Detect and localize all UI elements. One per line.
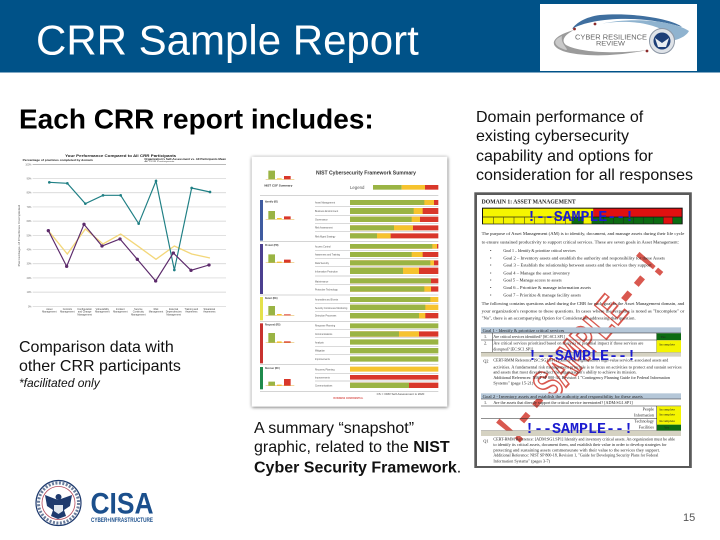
goal tables: Incomplete: [659, 412, 675, 416]
goal tables: 1.: [484, 334, 487, 339]
domain header and goals: •: [490, 292, 492, 297]
panel: NIST framework summary: NIST Cybersecurity Framework Summary: [316, 171, 417, 177]
domain header and goals: your organization's response to these questions. In cases where the response is noted as "Incomplete" or: [482, 308, 685, 313]
category bars: [350, 200, 438, 388]
domain header and goals: Goal 6 – Prioritize & manage information assets: [503, 285, 591, 290]
domain header and goals: •: [490, 248, 492, 253]
panel: NIST framework summary: Recover (RC): [265, 368, 280, 370]
text block: summary snapshot: Cyber Security Framework.: [254, 460, 461, 476]
panel: NIST framework summary: Maintenance: [315, 280, 329, 283]
domain header and goals: The purpose of Asset Management (AM) is to identify, document, and manage assets during their life cycle: [482, 231, 685, 237]
logo: CISA wordmark: CYBER+INFRASTRUCTURE: [91, 518, 153, 524]
panel: NIST framework summary: Mitigation: [315, 350, 326, 353]
domain header and goals: Goal 1 – Identify & prioritize critical services: [503, 248, 576, 253]
domain header and goals: •: [490, 263, 492, 268]
goal tables: [481, 327, 682, 463]
goal tables: Goal 2 - Inventory assets and establish the authority and responsibility for these assets: [483, 394, 643, 399]
chart: comparison line chart: Management: [149, 311, 164, 314]
goal tables: Are the assets that directly support the critical service inventoried? [ADM:SG1.SP1]: [493, 400, 633, 405]
logo: Cyber Resilience Review: [540, 4, 697, 71]
domain header and goals: "No", there is an accompanying Option for Consideration addressing that question.: [482, 315, 636, 321]
chart: comparison line chart: 60%: [27, 221, 31, 223]
chart: comparison line chart: Service: [134, 308, 143, 311]
panel: NIST framework summary: BUSINESS CONFIDENTIAL: [333, 397, 364, 400]
domain header and goals: Goal 4 – Manage the asset inventory: [503, 270, 571, 275]
panel: NIST framework summary: Legend: [350, 185, 365, 190]
chart: comparison line chart: 10%: [27, 292, 31, 294]
chart: comparison line chart: Management: [131, 313, 146, 316]
text block: domain performance: capability and options for: [476, 148, 654, 165]
domain header and goals: DOMAIN 1: ASSET MANAGEMENT: [482, 199, 576, 206]
watermark: blue sample stamps: !--SAMPLE--!: [528, 348, 636, 365]
panel: NIST framework summary: Awareness and Training: [315, 254, 341, 257]
logo: Cyber Resilience Review: REVIEW: [596, 40, 626, 48]
domain header and goals: The following contains questions asked during the CRR for each goal in the Asset Management domain, and: [482, 301, 685, 307]
chart: comparison line chart: Management: [113, 311, 128, 314]
chart: comparison line chart: [17, 152, 230, 318]
chart: comparison line chart: 40%: [27, 250, 31, 252]
title: CRR Sample Report: [36, 16, 419, 64]
chart: comparison line chart: Incident: [116, 308, 125, 311]
goal tables: Are critical services identified? [SC:SC1.SP1]: [493, 334, 566, 339]
text block: summary snapshot: [254, 420, 461, 476]
note: facilitated only: *facilitated only: [19, 376, 101, 390]
logo: CISA wordmark: CISA: [90, 488, 154, 520]
goal tables: People: [643, 407, 654, 412]
chart: comparison line chart: Awareness: [203, 311, 216, 314]
chart: comparison line chart: Training and: [184, 308, 199, 311]
panel: NIST framework summary: Response Planning: [315, 326, 336, 328]
panel: NIST framework summary: Anomalies and Events: [315, 299, 339, 302]
goal tables: CERT-RMM Reference: [ADM:SG1.SP1] Identify and inventory critical assets. An organization must be able: [493, 437, 675, 442]
chart: comparison line chart: Management: [60, 311, 75, 314]
domain header and goals: [482, 199, 685, 321]
goal tables: Information Systems" (pages 3-7): [493, 458, 551, 463]
chart: comparison line chart: Percentage of practices completed by domain: [23, 158, 93, 162]
chart: comparison line chart: Percentage of Practices Completed: [17, 204, 21, 266]
chart: comparison line chart: 90%: [27, 179, 31, 181]
goal tables: 2.: [484, 341, 487, 346]
chart: comparison line chart: Awareness: [185, 311, 198, 314]
chart: comparison line chart: Continuity: [133, 311, 145, 314]
chart: comparison line chart: Controls: [63, 308, 73, 311]
chart: comparison line chart: Management: [42, 311, 57, 314]
chart: comparison line chart: 70%: [27, 207, 31, 209]
chart: comparison line chart: Organization's Self-Assessment vs. All Participants Mean: [144, 158, 227, 161]
chart: comparison line chart: 0%: [28, 306, 31, 308]
text block: summary snapshot: A summary “snapshot”: [254, 420, 414, 437]
header bar: [0, 0, 720, 72]
panel: NIST framework summary: Improvements: [315, 358, 331, 361]
panel: NIST framework summary: Risk Assessment: [315, 227, 333, 230]
watermark: blue sample stamps: !--SAMPLE--!: [527, 209, 634, 226]
chart: comparison line chart: Your Performance Compared to All CRR Participants: [65, 154, 176, 158]
panel: NIST framework summary: Business Environment: [315, 210, 339, 213]
goal tables: Incomplete: [659, 419, 675, 423]
chart: comparison line chart: 20%: [27, 278, 31, 280]
panel: NIST framework summary: Data Security: [315, 262, 330, 265]
panel: domain report sample: [474, 192, 692, 468]
text block: summary snapshot: graphic, related to the NIST: [254, 439, 450, 456]
goal tables: Systems" (page 15-21): [493, 381, 534, 386]
domain header and goals: Goal 2 – Inventory assets and establish the authority and responsibility for these Assets: [503, 255, 665, 260]
small bars: [266, 171, 294, 386]
panel: NIST framework summary: Protect (PR): [265, 244, 279, 247]
panel: NIST framework summary: Improvements: [315, 376, 331, 379]
text block: comparison data: other CRR participants: [19, 358, 181, 375]
domain header and goals: Goal 7 – Prioritize & manage facility assets: [503, 292, 581, 297]
goal tables: Information: [634, 412, 655, 417]
logo: Cyber Resilience Review: CYBER RESILIENCE: [575, 32, 647, 42]
goal tables: Q1: [483, 438, 488, 443]
panel: NIST framework summary: [252, 157, 447, 407]
panel: NIST framework summary: Communications: [315, 384, 333, 387]
panel: NIST framework summary: Access Control: [315, 245, 331, 248]
domain header and goals: to ensure sustained productivity to support critical services. These are seven goals in Asset Management:: [482, 239, 679, 244]
panel: NIST framework summary: Risk Mgmt Strategy: [315, 235, 336, 238]
panel: NIST framework summary: Detection Processes: [315, 315, 337, 318]
panel: NIST framework summary: Governance: [315, 219, 328, 222]
text block: domain performance: existing cybersecurity: [476, 128, 629, 145]
goal tables: Goal 1 - Identify & prioritize critical services: [483, 328, 565, 333]
domain header and goals: Goal 3 – Establish the relationship between assets and the services they support: [503, 263, 653, 268]
panel: NIST framework summary: Detect (DE): [265, 297, 278, 300]
panel: NIST framework summary: Information Protection: [315, 270, 338, 273]
chart: comparison line chart: and Change: [78, 311, 92, 314]
text block: domain performance: Domain performance of: [476, 109, 644, 126]
logo: DHS seal: [36, 480, 81, 526]
goal tables: Additional References: NIST SP 800-34, Revision 1 "Contingency Planning Guide for Federal Information: [493, 375, 671, 381]
panel: NIST framework summary: Identify (ID): [265, 200, 278, 203]
domain header and goals: •: [490, 255, 492, 260]
chart: comparison line chart: Risk: [154, 308, 159, 311]
chart: comparison line chart: Dependencies: [166, 311, 182, 314]
chart: comparison line chart: Configuration: [77, 308, 93, 311]
chart: comparison line chart: Vulnerability: [96, 308, 110, 311]
goal tables: Q2: [483, 359, 488, 364]
goal tables: Incomplete: [659, 407, 675, 411]
goal tables: Are critical services prioritized based on analysis of potential impact if those services are: [493, 341, 643, 346]
watermark: diagonal red sample: !--SAMPLE--!: [487, 242, 679, 458]
chart: comparison line chart: All CRR Participants: [144, 160, 174, 163]
goal tables: Facilities: [639, 424, 654, 429]
chart: comparison line chart: Situational: [204, 308, 216, 311]
panel: NIST framework summary: CS = CRR Self-Assessment is 2020: [377, 392, 425, 396]
goal tables: to identify its critical assets, document them, and establish their value in order to develop strategies for: [493, 442, 667, 448]
chart: comparison line chart: Management: [77, 313, 92, 316]
panel: NIST framework summary: Asset Management: [315, 201, 335, 204]
domain header and goals: •: [490, 285, 492, 290]
goal tables: and assets that most directly affect the organization's ability to achieve its mission.: [493, 370, 637, 375]
domain header and goals: Goal 5 – Manage access to assets: [503, 278, 562, 283]
panel: NIST framework summary: Protective Technology: [315, 289, 339, 292]
goal tables: Additional Reference: NIST SP 800-18, Revision 1, "Guide for Developing Security Plans for Federal: [493, 453, 659, 459]
chart: comparison line chart: Management: [166, 313, 181, 316]
chart: comparison line chart: Asset: [46, 308, 53, 311]
text block: comparison data: Comparison data with: [19, 339, 174, 356]
goal tables: CERT-RMM Reference: [SC:SG1.SP1] Identify the organization's high-value services, associated assets and: [493, 358, 669, 364]
panel: NIST framework summary: Recovery Planning: [315, 368, 335, 371]
chart: comparison line chart: 80%: [27, 193, 31, 195]
goal tables: Yes: [664, 426, 670, 430]
panel: NIST framework summary: Security Continuous Monitoring: [315, 307, 348, 310]
domain header and goals: •: [490, 270, 492, 275]
chart: comparison line chart: Management: [95, 311, 110, 314]
chart: comparison line chart: 30%: [27, 264, 31, 266]
goal tables: protecting and sustaining assets commensurate with their value to the services they support.: [493, 447, 660, 452]
goal tables: Technology: [634, 418, 655, 423]
goal tables: 1.: [484, 400, 487, 405]
chart: comparison line chart: 50%: [27, 235, 31, 237]
panel: NIST framework summary: NIST CSF Summary: [264, 184, 293, 188]
panel: NIST framework summary: Respond (RS): [265, 324, 281, 326]
goal tables: Yes: [661, 335, 666, 339]
panel: NIST framework summary: Communications: [315, 333, 333, 336]
domain header and goals: •: [490, 278, 492, 283]
watermark: blue sample stamps: [525, 209, 636, 438]
panel: NIST framework summary: Analysis: [315, 341, 325, 344]
text block: domain performance: consideration for all responses: [476, 167, 693, 184]
goal tables: disrupted? [EC:SC1.SP1]: [493, 347, 534, 352]
heading: each CRR report includes: Each CRR report includes:: [19, 104, 374, 134]
chart: comparison line chart: External: [169, 308, 179, 311]
watermark: blue sample stamps: !--SAMPLE--!: [525, 421, 633, 438]
chart: comparison line chart: 100%: [25, 164, 31, 166]
goal tables: activities. A fundamental risk management principle is to focus on activities to protect and sustain services: [493, 364, 682, 369]
page number: 15: [683, 512, 695, 524]
goal tables: Incomplete: [659, 342, 675, 346]
